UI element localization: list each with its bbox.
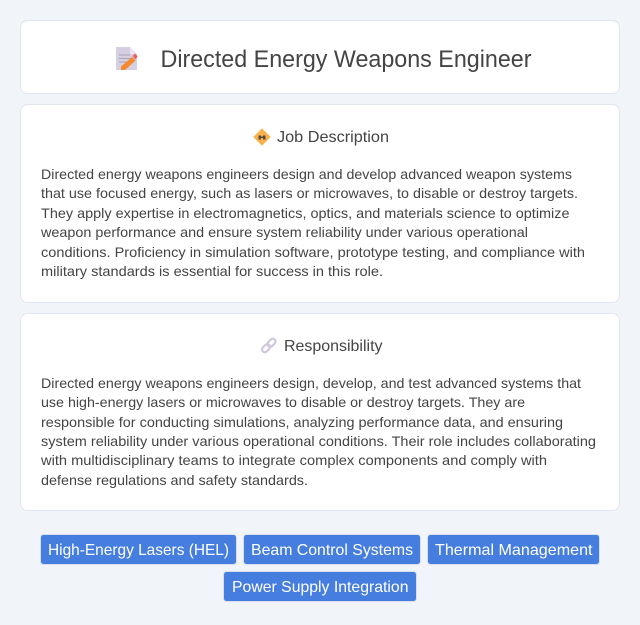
tag: high-energy lasers: High-Energy Lasers (HEL) [48, 542, 229, 559]
text block: job description: Directed energy weapons engineers design and develop advanced weapon systems [41, 166, 572, 182]
panel: job description [20, 104, 620, 302]
text block: job description: weapon performance and ensure system reliability under various operational [40, 224, 528, 240]
tag: power supply integration [224, 572, 416, 602]
text block: responsibility: with multidisciplinary teams to integrate complex components and comply with [40, 452, 547, 468]
panel: responsibility [20, 314, 620, 510]
text block: job description: conditions. Proficiency in simulation software, prototype testing, and compliance with [41, 244, 585, 260]
tag: high-energy lasers [40, 534, 236, 564]
text block: responsibility [40, 375, 596, 488]
text block: responsibility: use high-energy lasers or microwaves to disable or destroy targets. They are [41, 394, 525, 410]
text block: job description: military standards is essential for success in this role. [41, 263, 383, 279]
icon: orange diamond [254, 129, 270, 145]
icon: chain link [261, 338, 277, 353]
text block: job description: They apply expertise in electromagnetics, optics, and materials science to optimize [41, 205, 570, 221]
text block: job description: that use focused energy, such as lasers or microwaves, to disable or destroy targets. [41, 185, 578, 201]
tag: beam control systems [244, 534, 420, 564]
text block: responsibility: Directed energy weapons engineers design, develop, and test advanced systems that [41, 375, 581, 391]
heading: responsibility: Responsibility [284, 338, 382, 355]
tag: beam control systems: Beam Control Systems [251, 542, 413, 559]
title: Directed Energy Weapons Engineer [160, 46, 532, 73]
tag: power supply integration: Power Supply Integration [232, 579, 408, 596]
text block: responsibility: system reliability under various operational conditions. Their role includes collaborating [41, 433, 596, 449]
text block: responsibility: responsible for conducting simulations, analyzing performance data, and ensuring [41, 414, 563, 430]
heading: job description: Job Description [277, 129, 389, 146]
tag: thermal management [428, 534, 600, 564]
icon: document with pencil [116, 47, 138, 70]
panel: title header [20, 20, 620, 94]
tag: thermal management: Thermal Management [435, 542, 593, 559]
text block: responsibility: defense regulations and safety standards. [41, 472, 308, 488]
text block: job description [40, 166, 585, 279]
